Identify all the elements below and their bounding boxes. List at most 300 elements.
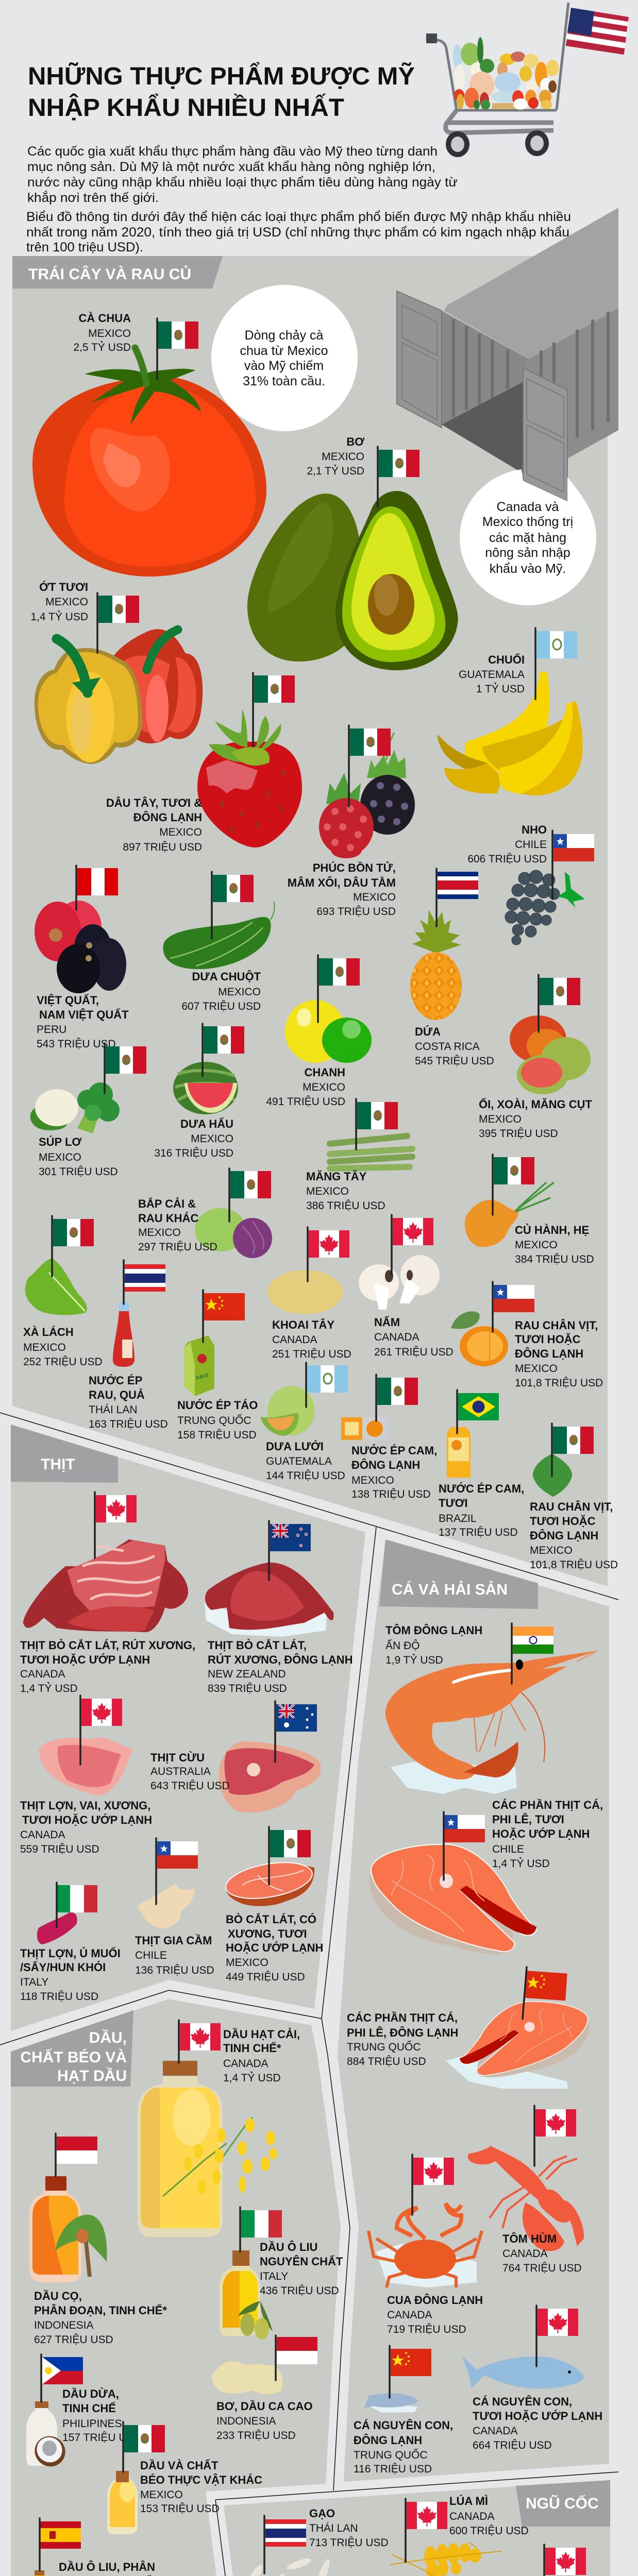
- label: PERU: [37, 1024, 66, 1036]
- tag: ngũ cốc: [516, 2480, 610, 2527]
- label: MÂM XÔI, DÂU TẰM: [288, 876, 396, 889]
- icon: lettuce: [25, 1258, 87, 1315]
- food: nước ép táo: [177, 1290, 258, 1441]
- label: MEXICO: [191, 1133, 233, 1145]
- flag: Mexico: [105, 1043, 146, 1093]
- food: bò cắt lát có xương: [223, 1827, 323, 1983]
- label: DẦU DỪA,: [62, 2387, 119, 2400]
- label: TINH CHẾ*: [223, 2042, 281, 2055]
- label: THỊT CỪU: [150, 1751, 205, 1764]
- tag: dầu, chất béo và hạt dầu: [11, 2010, 133, 2087]
- icon: potato: [267, 1270, 343, 1314]
- food: dứa: [410, 869, 494, 1067]
- label: 449 TRIỆU USD: [226, 1971, 305, 1983]
- flag: Chile: [552, 831, 594, 899]
- food: rau chân vịt: [530, 1423, 618, 1571]
- food: măng tây: [306, 1099, 412, 1212]
- label: THỊT LỢN, VAI, XƯƠNG,: [20, 1799, 150, 1812]
- food: bắp cải: [138, 1168, 272, 1258]
- label: MEXICO: [530, 1545, 573, 1556]
- icon: fresh fish: [462, 2355, 584, 2388]
- icon: raspberry and blackberry: [319, 733, 415, 858]
- label: NẤM: [374, 1316, 400, 1329]
- panel: trái cây và rau củ: [12, 256, 608, 1586]
- flag: New Zealand: [269, 1521, 311, 1580]
- food: thịt gia cầm: [135, 1838, 214, 1976]
- intro text: nhất trong năm 2020, tính theo giá trị USD (chỉ những thực phẩm có kim ngạch nhập khẩu: [26, 225, 569, 240]
- flag: Mexico: [318, 955, 360, 1022]
- label: 713 TRIỆU USD: [309, 2537, 389, 2549]
- label: TRUNG QUỐC: [354, 2449, 428, 2461]
- icon: onion: [465, 1182, 554, 1247]
- label: MEXICO: [351, 1475, 394, 1486]
- label: 436 TRIỆU USD: [260, 2285, 339, 2297]
- flag: Thailand: [124, 1260, 165, 1304]
- label: ITALY: [20, 1976, 48, 1988]
- label: 157 TRIỆU USD: [62, 2432, 142, 2444]
- label: 559 TRIỆU USD: [20, 1843, 99, 1855]
- label: CÁ NGUYÊN CON,: [473, 2395, 572, 2408]
- label: CHILE: [135, 1950, 167, 1961]
- icon: rice grains: [245, 2556, 361, 2576]
- label: RAU, QUẢ: [89, 1388, 145, 1401]
- icon: mango and guava: [510, 1015, 591, 1094]
- food: chuối: [438, 628, 583, 795]
- label: 316 TRIỆU USD: [154, 1147, 233, 1159]
- callout: tomato share: 31% toàn cầu.: [243, 374, 325, 388]
- icon: olive oil small bottle: [28, 2570, 56, 2576]
- icon: cauliflower and broccoli: [30, 1082, 120, 1133]
- icon: olive oil bottle: [220, 2250, 273, 2340]
- callout: Canada and Mexico dominate: các mặt hàng: [489, 531, 566, 545]
- label: 1,4 TỶ USD: [30, 611, 88, 623]
- label: ẤN ĐỘ: [385, 1640, 420, 1652]
- label: BƠ: [346, 435, 364, 448]
- label: NƯỚC ÉP CAM,: [351, 1444, 437, 1457]
- label: DẦU CỌ,: [34, 2290, 82, 2302]
- label: BRAZIL: [439, 1513, 477, 1524]
- intro text: Các quốc gia xuất khẩu thực phẩm hàng đầu vào Mỹ theo từng danh: [27, 144, 438, 159]
- flag: Mexico: [229, 1168, 271, 1222]
- label: TRUNG QUỐC: [177, 1414, 251, 1427]
- label: HOẶC ƯỚP LẠNH: [226, 1941, 323, 1954]
- label: 116 TRIỆU USD: [354, 2463, 432, 2475]
- label: 643 TRIỆU USD: [150, 1780, 230, 1792]
- icon: lamb cut: [219, 1741, 321, 1812]
- flag: Italy: [57, 1883, 97, 1927]
- label: NƯỚC ÉP TÁO: [177, 1399, 258, 1412]
- tag: ngũ cốc: NGŨ CỐC: [526, 2495, 599, 2512]
- label: AUSTRALIA: [150, 1766, 211, 1777]
- flag: Mexico: [378, 447, 419, 507]
- label: RAU CHÂN VỊT,: [515, 1319, 598, 1332]
- label: ĐÔNG LẠNH: [133, 811, 202, 824]
- label: DỨA: [415, 1025, 441, 1038]
- food: phúc bồn tử: [288, 725, 415, 918]
- food: tôm hùm: [468, 2106, 584, 2274]
- food: cá đông lạnh: [347, 1967, 589, 2089]
- label: KHOAI TÂY: [272, 1318, 334, 1331]
- label: 138 TRIỆU USD: [351, 1488, 431, 1500]
- flag: Chile: [444, 1812, 485, 1880]
- icon: palm oil bottle and palm tree: [29, 2176, 107, 2282]
- callout: tomato share: Dòng chảy cà: [245, 328, 324, 343]
- label: NƯỚC ÉP CAM,: [439, 1482, 524, 1495]
- flag: Mexico: [157, 318, 198, 379]
- label: DẦU VÀ CHẤT: [140, 2459, 219, 2472]
- icon: orange: [451, 1311, 508, 1366]
- flag: Canada: [80, 1696, 122, 1765]
- food: lúa mì: [390, 2495, 529, 2576]
- flag: Mexico: [349, 725, 391, 806]
- label: 693 TRIỆU USD: [316, 906, 396, 918]
- icon: crab: [368, 2204, 482, 2287]
- tag: dầu, chất béo và hạt dầu: CHẤT BÉO VÀ: [20, 2048, 127, 2066]
- label: MEXICO: [353, 891, 396, 903]
- icon: strawberry: [197, 709, 302, 848]
- food: ổi, xoài, măng cụt: [479, 975, 593, 1140]
- callout: tomato share: [211, 285, 358, 431]
- label: NEW ZEALAND: [208, 1668, 286, 1680]
- food: bơ: [247, 435, 458, 670]
- label: HOẶC ƯỚP LẠNH: [492, 1827, 590, 1840]
- label: CỦ HÀNH, HẸ: [515, 1224, 589, 1236]
- icon: orange juice carton: [447, 1427, 471, 1478]
- label: 2,5 TỶ USD: [73, 342, 131, 353]
- icon: apple juice carton: JUICE: [195, 1372, 209, 1381]
- label: 144 TRIỆU USD: [266, 1470, 345, 1482]
- icon: wheat: [424, 2543, 481, 2576]
- flag: Canada: [544, 2545, 586, 2576]
- label: 491 TRIỆU USD: [266, 1096, 345, 1108]
- label: 545 TRIỆU USD: [415, 1055, 494, 1067]
- icon: lobster: [468, 2146, 584, 2251]
- icon: beef cut: [23, 1539, 188, 1632]
- label: TƯƠI HOẶC ƯỚP LẠNH: [20, 1653, 150, 1666]
- panel: thịt: [11, 1425, 365, 2031]
- flag: Philippines: [41, 2354, 83, 2402]
- label: GẠO: [309, 2507, 335, 2520]
- label: VIỆT QUẤT,: [37, 994, 99, 1007]
- label: 386 TRIỆU USD: [306, 1200, 385, 1212]
- flag: China: [390, 2346, 431, 2398]
- label: CANADA: [473, 2425, 518, 2437]
- label: 163 TRIỆU USD: [89, 1418, 168, 1430]
- label: TƯƠI: [439, 1497, 468, 1510]
- food: dưa hấu: [154, 1024, 244, 1159]
- label: 600 TRIỆU USD: [449, 2525, 529, 2537]
- food: khoai tây: [267, 1227, 351, 1360]
- label: NAM VIỆT QUẤT: [39, 1008, 129, 1021]
- food: tôm đông lạnh: [385, 1623, 598, 1794]
- tag: cá và hải sản: [379, 1539, 538, 1609]
- flag: Spain: [40, 2518, 81, 2570]
- food: bơ, dầu ca cao: [212, 2335, 317, 2442]
- label: PHI LÊ, TƯƠI: [492, 1813, 564, 1826]
- icon: asparagus: [330, 1136, 412, 1168]
- label: 1,9 TỶ USD: [385, 1654, 443, 1666]
- icon: frozen beef: [205, 1563, 334, 1637]
- label: MEXICO: [138, 1227, 181, 1239]
- food: việt quất: [35, 866, 129, 1050]
- flag: Mexico: [376, 1375, 418, 1421]
- label: MEXICO: [303, 1081, 345, 1093]
- tag: thịt: THỊT: [41, 1456, 75, 1473]
- label: CANADA: [449, 2511, 495, 2522]
- label: ĐÔNG LẠNH: [354, 2434, 422, 2447]
- flag: Mexico: [552, 1423, 594, 1476]
- label: 153 TRIỆU USD: [140, 2503, 220, 2515]
- panel: dầu, chất béo và hạt dầu: [11, 1999, 341, 2576]
- label: 158 TRIỆU USD: [177, 1429, 257, 1441]
- callout: Canada and Mexico dominate: khẩu vào Mỹ.: [490, 562, 566, 576]
- label: CUA ĐÔNG LẠNH: [387, 2294, 483, 2307]
- food: cá tươi Chile: [370, 1799, 603, 1954]
- food: dưa chuột: [163, 872, 274, 1012]
- label: TƯƠI HOẶC ƯỚP LẠNH: [473, 2410, 602, 2422]
- flag: Mexico: [52, 1216, 94, 1276]
- callout: Canada and Mexico dominate: [460, 469, 596, 605]
- flag: China: [203, 1290, 245, 1342]
- label: MEXICO: [226, 1957, 268, 1969]
- flag: Mexico: [212, 872, 254, 939]
- icon: coconut oil bottle: [26, 2401, 72, 2472]
- label: TƯƠI HOẶC: [515, 1333, 581, 1346]
- flag: Thailand: [264, 2516, 306, 2573]
- flag: Mexico: [539, 975, 580, 1032]
- flag: Canada: [534, 2106, 576, 2166]
- label: DẦU Ô LIU: [260, 2241, 317, 2253]
- label: 897 TRIỆU USD: [123, 841, 202, 853]
- label: TINH CHẾ: [62, 2402, 116, 2415]
- label: MĂNG TÂY: [306, 1170, 367, 1183]
- label: MEXICO: [515, 1239, 558, 1251]
- label: CHILE: [492, 1843, 524, 1855]
- label: MEXICO: [218, 986, 261, 998]
- flag: Mexico: [97, 593, 139, 653]
- label: 719 TRIỆU USD: [387, 2324, 466, 2335]
- label: 233 TRIỆU USD: [216, 2430, 296, 2442]
- label: MEXICO: [45, 596, 88, 608]
- flag: Peru: [76, 866, 118, 910]
- label: 884 TRIỆU USD: [347, 2056, 426, 2067]
- flag: Guatemala: [306, 1363, 348, 1407]
- flag: Chile: [156, 1838, 198, 1904]
- label: MEXICO: [140, 2489, 183, 2501]
- label: 101,8 TRIỆU USD: [515, 1377, 603, 1389]
- food: cà chua: [32, 312, 266, 577]
- food: thịt cừu: [150, 1701, 321, 1812]
- icon: melon: [260, 1386, 315, 1436]
- label: NGUYÊN CHẤT: [260, 2255, 343, 2268]
- label: 297 TRIỆU USD: [138, 1241, 217, 1253]
- label: LÚA MÌ: [449, 2495, 488, 2507]
- tag: cá và hải sản: CÁ VÀ HẢI SẢN: [392, 1581, 508, 1598]
- label: MEXICO: [515, 1363, 558, 1375]
- food: ớt tươi: [30, 581, 203, 764]
- food: cá nguyên con đông lạnh: [354, 2346, 453, 2475]
- label: CANADA: [374, 1331, 419, 1343]
- label: 395 TRIỆU USD: [479, 1128, 558, 1140]
- icon: salami: [37, 1912, 77, 1944]
- flag: Mexico: [269, 1827, 311, 1885]
- flag: China: [523, 1967, 567, 2019]
- label: /SẤY/HUN KHÓI: [20, 1961, 106, 1974]
- flag: Chile: [493, 1282, 534, 1332]
- label: NHO: [522, 823, 547, 836]
- flag: Indonesia: [276, 2335, 317, 2380]
- food: dầu và chất béo thực vật khác: [107, 2422, 262, 2534]
- label: CHANH: [305, 1066, 345, 1079]
- label: ĐÔNG LẠNH: [351, 1459, 420, 1471]
- icon: orange juice can: [341, 1417, 389, 1440]
- icon: cucumber: [163, 902, 274, 969]
- food: gạo: [245, 2507, 389, 2576]
- food: nước ép cam, tươi: [439, 1390, 524, 1538]
- label: 607 TRIỆU USD: [181, 1001, 261, 1012]
- flag: Mexico: [123, 2422, 165, 2472]
- label: 627 TRIỆU USD: [34, 2334, 113, 2346]
- flag: Mexico: [253, 673, 295, 747]
- flag: Canada: [406, 2499, 447, 2562]
- label: ĐÔNG LẠNH: [515, 1347, 583, 1360]
- icon: grape leaf: [558, 872, 585, 908]
- label: THỊT BÒ CẮT LÁT, RÚT XƯƠNG,: [20, 1639, 195, 1652]
- flag: Mexico: [203, 1024, 244, 1076]
- icon: shipping container: [397, 208, 618, 501]
- flag: Canada: [536, 2306, 578, 2366]
- label: SÚP LƠ: [39, 1136, 81, 1148]
- label: TƯƠI HOẶC ƯỚP LẠNH: [22, 1814, 152, 1826]
- icon: apple juice carton: [184, 1335, 214, 1396]
- callout: Canada and Mexico dominate: nông sản nhập: [485, 546, 570, 560]
- label: 251 TRIỆU USD: [272, 1348, 351, 1360]
- label: RAU CHÂN VỊT,: [530, 1500, 613, 1513]
- label: CANADA: [223, 2058, 268, 2070]
- label: PHÂN ĐOẠN, TINH CHẾ*: [34, 2304, 167, 2317]
- icon: salmon steak: [370, 1844, 536, 1954]
- label: CÀ CHUA: [79, 312, 131, 325]
- label: MEXICO: [479, 1113, 522, 1125]
- icon: mushrooms: [359, 1255, 440, 1310]
- label: BÒ CẮT LÁT, CÓ: [226, 1913, 316, 1926]
- icon: grapes: [505, 870, 560, 945]
- food: thịt lợn ủ muối: [20, 1883, 121, 2003]
- panel: cá và hải sản: [338, 1539, 609, 2482]
- title: NHỮNG THỰC PHẨM ĐƯỢC MỸ: [28, 62, 415, 90]
- title: NHẬP KHẨU NHIỀU NHẤT: [28, 93, 344, 122]
- callout: tomato share: vào Mỹ chiếm: [244, 359, 324, 373]
- tag: dầu, chất béo và hạt dầu: HẠT DẦU: [57, 2067, 127, 2084]
- callout: tomato share: chua từ Mexico: [240, 344, 328, 358]
- label: XÀ LÁCH: [23, 1326, 74, 1338]
- label: GUATEMALA: [266, 1455, 332, 1467]
- icon: bananas: [438, 672, 583, 795]
- flag: Canada: [95, 1492, 137, 1558]
- label: 136 TRIỆU USD: [135, 1964, 214, 1976]
- label: TÔM HÙM: [502, 2232, 557, 2245]
- icon: tomato: [32, 348, 266, 577]
- label: CANADA: [20, 1829, 65, 1841]
- label: CANADA: [20, 1668, 65, 1680]
- label: 606 TRIỆU USD: [467, 853, 547, 865]
- label: DƯA LƯỚI: [266, 1440, 324, 1453]
- label: 664 TRIỆU USD: [473, 2439, 552, 2451]
- food: rau chân vịt (Chile): [451, 1282, 603, 1389]
- callout: Canada and Mexico dominate: Canada và: [497, 500, 559, 514]
- label: CHUỐI: [488, 653, 525, 666]
- label: RAU KHÁC: [138, 1212, 198, 1225]
- label: PHÚC BỒN TỬ,: [313, 861, 396, 874]
- icon: avocado: [247, 491, 458, 670]
- tag: trái cây và rau củ: TRÁI CÂY VÀ RAU CỦ: [28, 265, 191, 283]
- label: 1,4 TỶ USD: [492, 1858, 550, 1870]
- label: PHILIPINES: [62, 2418, 122, 2430]
- label: DẦU Ô LIU, PHÂN: [59, 2561, 155, 2573]
- icon: cranberries and blueberries: [35, 901, 126, 993]
- label: 543 TRIỆU USD: [37, 1038, 116, 1050]
- icon: pork shoulder: [39, 1737, 132, 1795]
- food: củ hành: [465, 1155, 594, 1265]
- label: XƯƠNG, TƯƠI: [228, 1927, 307, 1940]
- icon: watermelon: [173, 1062, 238, 1114]
- icon: cabbage: [195, 1208, 272, 1258]
- tag: trái cây và rau củ: [12, 256, 223, 289]
- food: cá nguyên con tươi: [462, 2306, 602, 2451]
- label: BẮP CẢI &: [138, 1197, 196, 1210]
- label: INDONESIA: [216, 2415, 276, 2427]
- tag: dầu, chất béo và hạt dầu: DẦU,: [89, 2029, 127, 2046]
- food: súp lơ: [30, 1043, 146, 1178]
- label: THỊT BÒ CẮT LÁT,: [208, 1639, 307, 1652]
- flag: Italy: [240, 2207, 282, 2251]
- label: NƯỚC ÉP: [89, 1374, 142, 1387]
- label: THÁI LAN: [309, 2522, 358, 2534]
- label: MEXICO: [322, 451, 364, 463]
- label: DẦU HẠT CẢI,: [223, 2028, 300, 2041]
- label: CHILE: [515, 839, 547, 851]
- icon: shopping cart with US flag: [426, 3, 629, 157]
- label: THỊT GIA CẦM: [135, 1934, 212, 1947]
- flag: Guatemala: [535, 628, 577, 699]
- icon: pineapple: [410, 910, 462, 1020]
- panel: ngũ cốc: [224, 2480, 610, 2576]
- food: thịt bò New Zealand: [205, 1521, 352, 1694]
- food: nước ép cam, đông lạnh: [341, 1375, 437, 1500]
- food: dầu hạt cải: [138, 2020, 300, 2237]
- label: 301 TRIỆU USD: [39, 1166, 118, 1178]
- icon: frozen fish: [364, 2394, 419, 2413]
- label: 1,4 TỶ USD: [20, 1683, 78, 1694]
- label: COSTA RICA: [415, 1041, 480, 1053]
- food: lúa mạch: [527, 2545, 616, 2576]
- food: dâu tây: [106, 673, 302, 853]
- flag: Canada: [179, 2020, 221, 2063]
- label: ĐÔNG LẠNH: [530, 1529, 598, 1542]
- icon: canola oil bottle: [138, 2061, 277, 2237]
- label: CANADA: [502, 2248, 548, 2260]
- label: DÂU TÂY, TƯƠI &: [106, 796, 202, 809]
- icon: shrimp: [385, 1651, 598, 1794]
- label: PHI LÊ, ĐÔNG LẠNH: [347, 2026, 458, 2039]
- label: 2,1 TỶ USD: [307, 465, 364, 477]
- food: dầu dừa: [26, 2354, 142, 2472]
- food: thịt lợn vai: [20, 1696, 152, 1855]
- label: ỔI, XOÀI, MĂNG CỤT: [479, 1098, 593, 1111]
- food: nho: [467, 823, 594, 945]
- flag: Canada: [392, 1215, 433, 1275]
- label: BƠ, DẦU CA CAO: [216, 2400, 313, 2413]
